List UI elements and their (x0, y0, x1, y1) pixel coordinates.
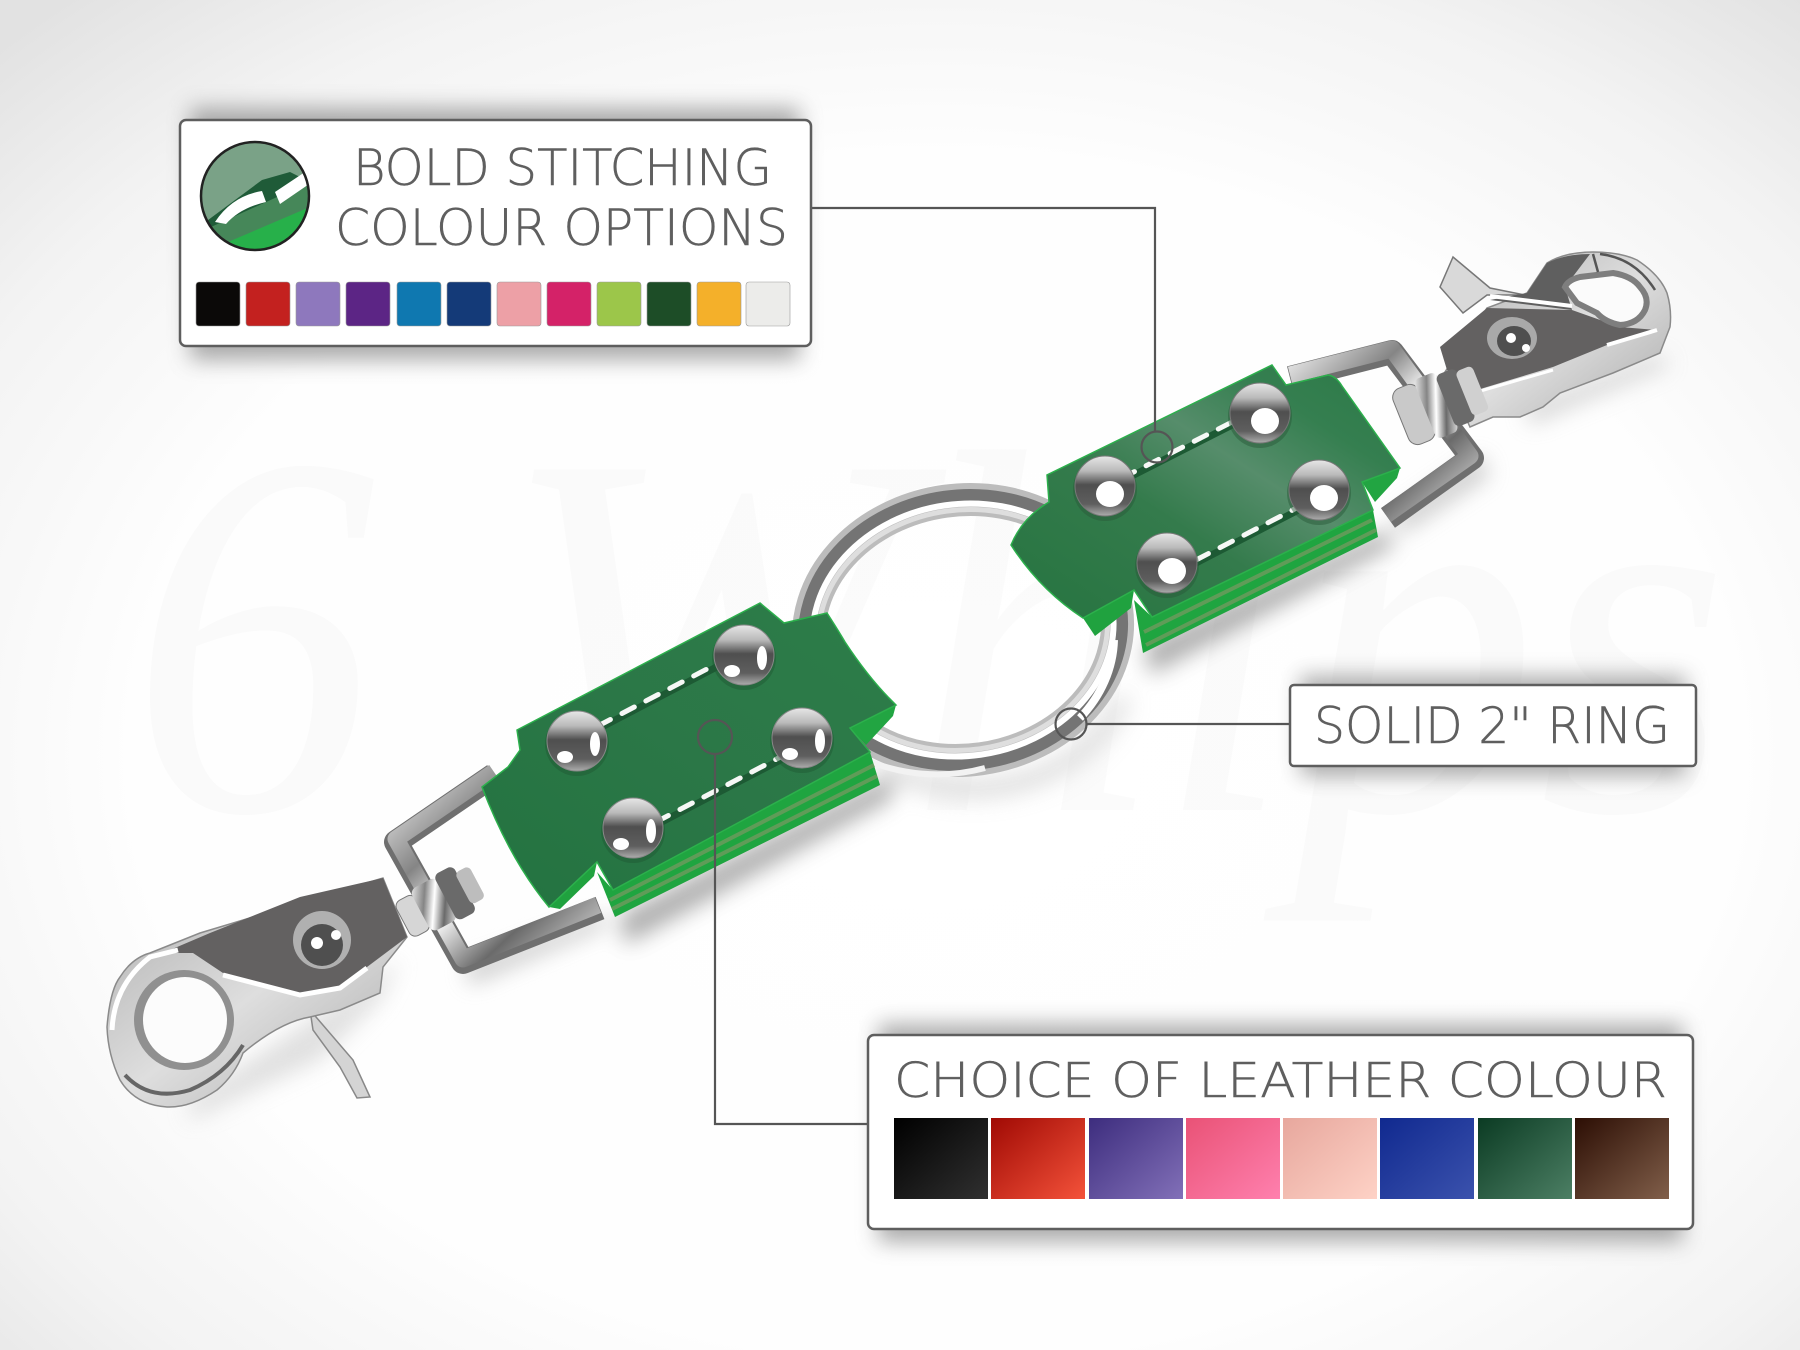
panel: leather colour (868, 1024, 1693, 1242)
panel: stitching colour options (180, 108, 811, 360)
strap: lower left (482, 603, 896, 917)
heading: choice of leather colour: CHOICE OF LEATHER COLOUR (894, 1053, 1667, 1109)
watermark: 6 Whips (130, 348, 1730, 924)
heading: bold stitching colour options: COLOUR OPTIONS (335, 199, 788, 257)
product: ring connector with two straps and clasps (107, 252, 1671, 1120)
heading: bold stitching colour options (335, 139, 788, 257)
clasp: upper right (1440, 252, 1671, 427)
rivets: lower strap (545, 625, 834, 863)
product shadow (190, 355, 1670, 1120)
panel: solid ring (1290, 676, 1696, 776)
label: solid 2 inch ring: SOLID 2" RING (1314, 697, 1670, 755)
rivets: upper strap (1073, 383, 1351, 598)
leader line: stitching (812, 208, 1172, 462)
leader line: leather (698, 720, 868, 1124)
swivel loop: upper clasp (1290, 349, 1472, 518)
swatches: leather colours (894, 1118, 1669, 1199)
heading: bold stitching colour options: BOLD STITCHING (353, 139, 772, 197)
ring (788, 476, 1138, 784)
swivel loop: lower clasp (396, 772, 600, 962)
clasp: lower left (107, 878, 407, 1107)
swivel barrel: upper clasp (1389, 358, 1493, 449)
leader line: ring (1056, 708, 1290, 740)
swivel barrel: lower clasp (391, 859, 489, 944)
icon: stitching detail (202, 143, 308, 249)
swatches: thread colours (196, 282, 790, 326)
strap: upper right (1011, 365, 1400, 653)
stitching: upper strap (1122, 418, 1312, 563)
stitching: lower strap (598, 658, 790, 825)
